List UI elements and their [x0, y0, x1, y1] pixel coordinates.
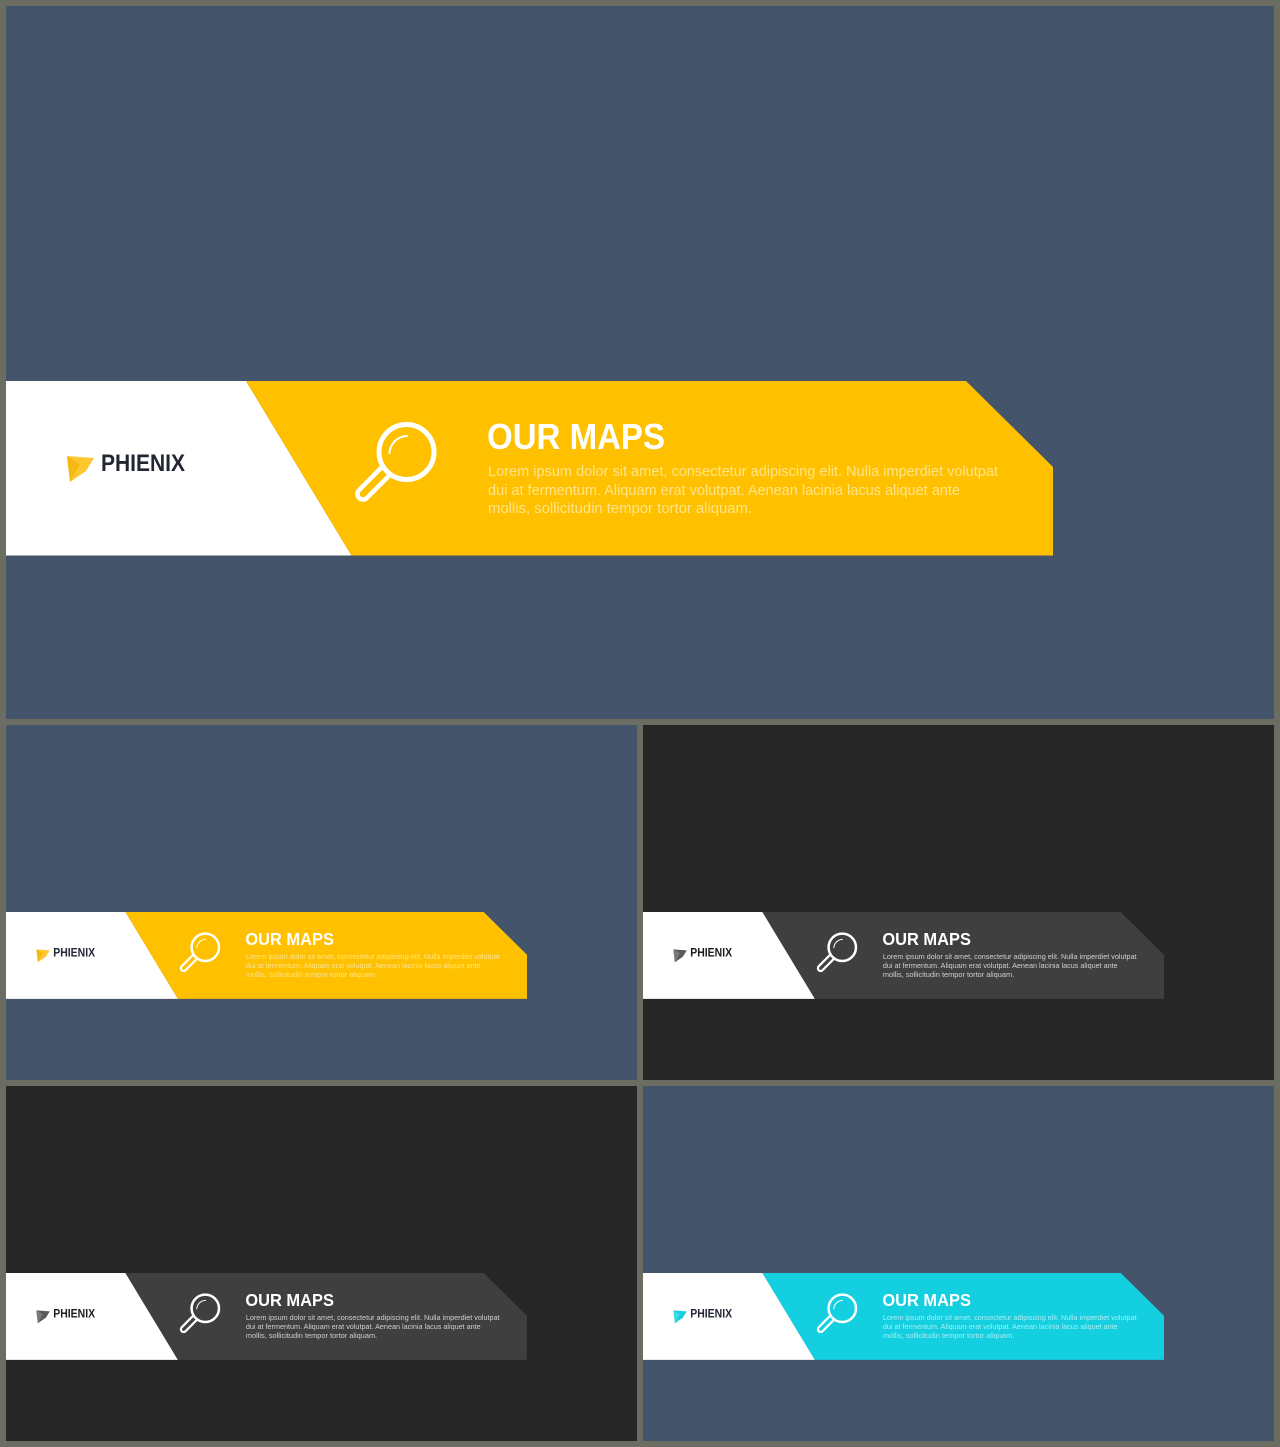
- body text: mollis, sollicitudin tempor tortor aliquam.: [246, 970, 377, 979]
- body text: dui at fermentum. Aliquam erat volutpat. Aenean lacinia lacus aliquet ante: [488, 482, 960, 499]
- panel: small dark with grey ribbon, top right: [643, 725, 1274, 1080]
- body text: Lorem ipsum dolor sit amet, consectetur adipiscing elit. Nulla imperdiet volutpat: [246, 1313, 501, 1322]
- body text: mollis, sollicitudin tempor tortor aliquam.: [883, 970, 1014, 979]
- heading: OUR MAPS: [882, 929, 971, 949]
- body text: Lorem ipsum dolor sit amet, consectetur adipiscing elit. Nulla imperdiet volutpat: [488, 463, 999, 480]
- heading: OUR MAPS: [882, 1290, 971, 1310]
- cyan ribbon: [762, 1273, 1164, 1360]
- body text: [246, 1313, 501, 1340]
- logo text: PHIENIX: [690, 945, 733, 959]
- logo: yellow arrow mark: [36, 949, 50, 962]
- yellow ribbon: [125, 912, 527, 999]
- body text: mollis, sollicitudin tempor tortor aliquam.: [883, 1331, 1014, 1340]
- panel: large navy with yellow ribbon: [6, 6, 1274, 719]
- heading: OUR MAPS: [245, 929, 334, 949]
- logo: grey arrow mark: [673, 949, 687, 962]
- icon: magnifying glass: [818, 1295, 856, 1332]
- body text: dui at fermentum. Aliquam erat volutpat. Aenean lacinia lacus aliquet ante: [246, 1322, 481, 1331]
- grey ribbon: [762, 912, 1164, 999]
- icon: magnifying glass: [181, 934, 219, 971]
- white logo area: [6, 381, 352, 556]
- body text: dui at fermentum. Aliquam erat volutpat. Aenean lacinia lacus aliquet ante: [246, 961, 481, 970]
- logo: yellow arrow mark: [67, 456, 94, 482]
- body text: dui at fermentum. Aliquam erat volutpat. Aenean lacinia lacus aliquet ante: [883, 1322, 1118, 1331]
- body text: [883, 1313, 1138, 1340]
- heading: OUR MAPS: [487, 416, 665, 457]
- heading: OUR MAPS: [245, 1290, 334, 1310]
- body text: [246, 952, 501, 979]
- body text: Lorem ipsum dolor sit amet, consectetur adipiscing elit. Nulla imperdiet volutpat: [246, 952, 501, 961]
- white logo area: [643, 1273, 815, 1360]
- panel: small dark with grey ribbon, bottom left: [6, 1086, 637, 1441]
- logo text: PHIENIX: [53, 1306, 96, 1320]
- panel: small navy with cyan ribbon: [643, 1086, 1274, 1441]
- white logo area: [6, 1273, 178, 1360]
- logo: grey arrow mark: [36, 1310, 50, 1323]
- body text: mollis, sollicitudin tempor tortor aliquam.: [246, 1331, 377, 1340]
- logo text: PHIENIX: [690, 1306, 733, 1320]
- icon: magnifying glass: [181, 1295, 219, 1332]
- white logo area: [6, 912, 178, 999]
- white logo area: [643, 912, 815, 999]
- body text: mollis, sollicitudin tempor tortor aliquam.: [488, 500, 752, 517]
- logo: cyan arrow mark: [673, 1310, 687, 1323]
- body text: Lorem ipsum dolor sit amet, consectetur adipiscing elit. Nulla imperdiet volutpat: [883, 1313, 1138, 1322]
- grey ribbon: [125, 1273, 527, 1360]
- icon: magnifying glass: [357, 424, 434, 500]
- panel: small navy with yellow ribbon: [6, 725, 637, 1080]
- yellow ribbon: [246, 381, 1053, 556]
- body text: [488, 463, 999, 517]
- body text: dui at fermentum. Aliquam erat volutpat. Aenean lacinia lacus aliquet ante: [883, 961, 1118, 970]
- body text: [883, 952, 1138, 979]
- icon: magnifying glass: [818, 934, 856, 971]
- logo text: PHIENIX: [101, 450, 186, 477]
- logo text: PHIENIX: [53, 945, 96, 959]
- body text: Lorem ipsum dolor sit amet, consectetur adipiscing elit. Nulla imperdiet volutpat: [883, 952, 1138, 961]
